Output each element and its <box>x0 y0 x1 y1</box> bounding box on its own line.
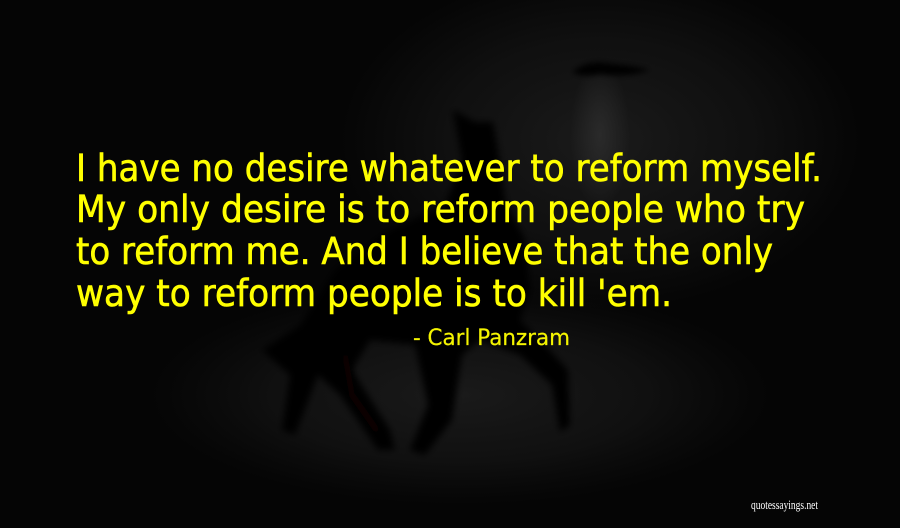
desert ground <box>150 285 770 505</box>
quote text: I have no desire whatever to reform myself. <box>76 147 822 190</box>
horse silhouette <box>262 110 570 455</box>
quote text: way to reform people is to kill 'em. <box>76 272 672 315</box>
lightning glow <box>570 60 630 210</box>
storm sky glow <box>340 0 860 310</box>
quote text: My only desire is to reform people who try <box>76 188 805 231</box>
horse legs red tint <box>345 355 378 432</box>
watermark: quotessayings.net <box>751 497 818 512</box>
dark cloud <box>572 62 650 76</box>
attribution: - Carl Panzram <box>413 326 570 351</box>
quote text: to reform me. And I believe that the only <box>76 230 773 273</box>
quote text <box>76 147 822 315</box>
